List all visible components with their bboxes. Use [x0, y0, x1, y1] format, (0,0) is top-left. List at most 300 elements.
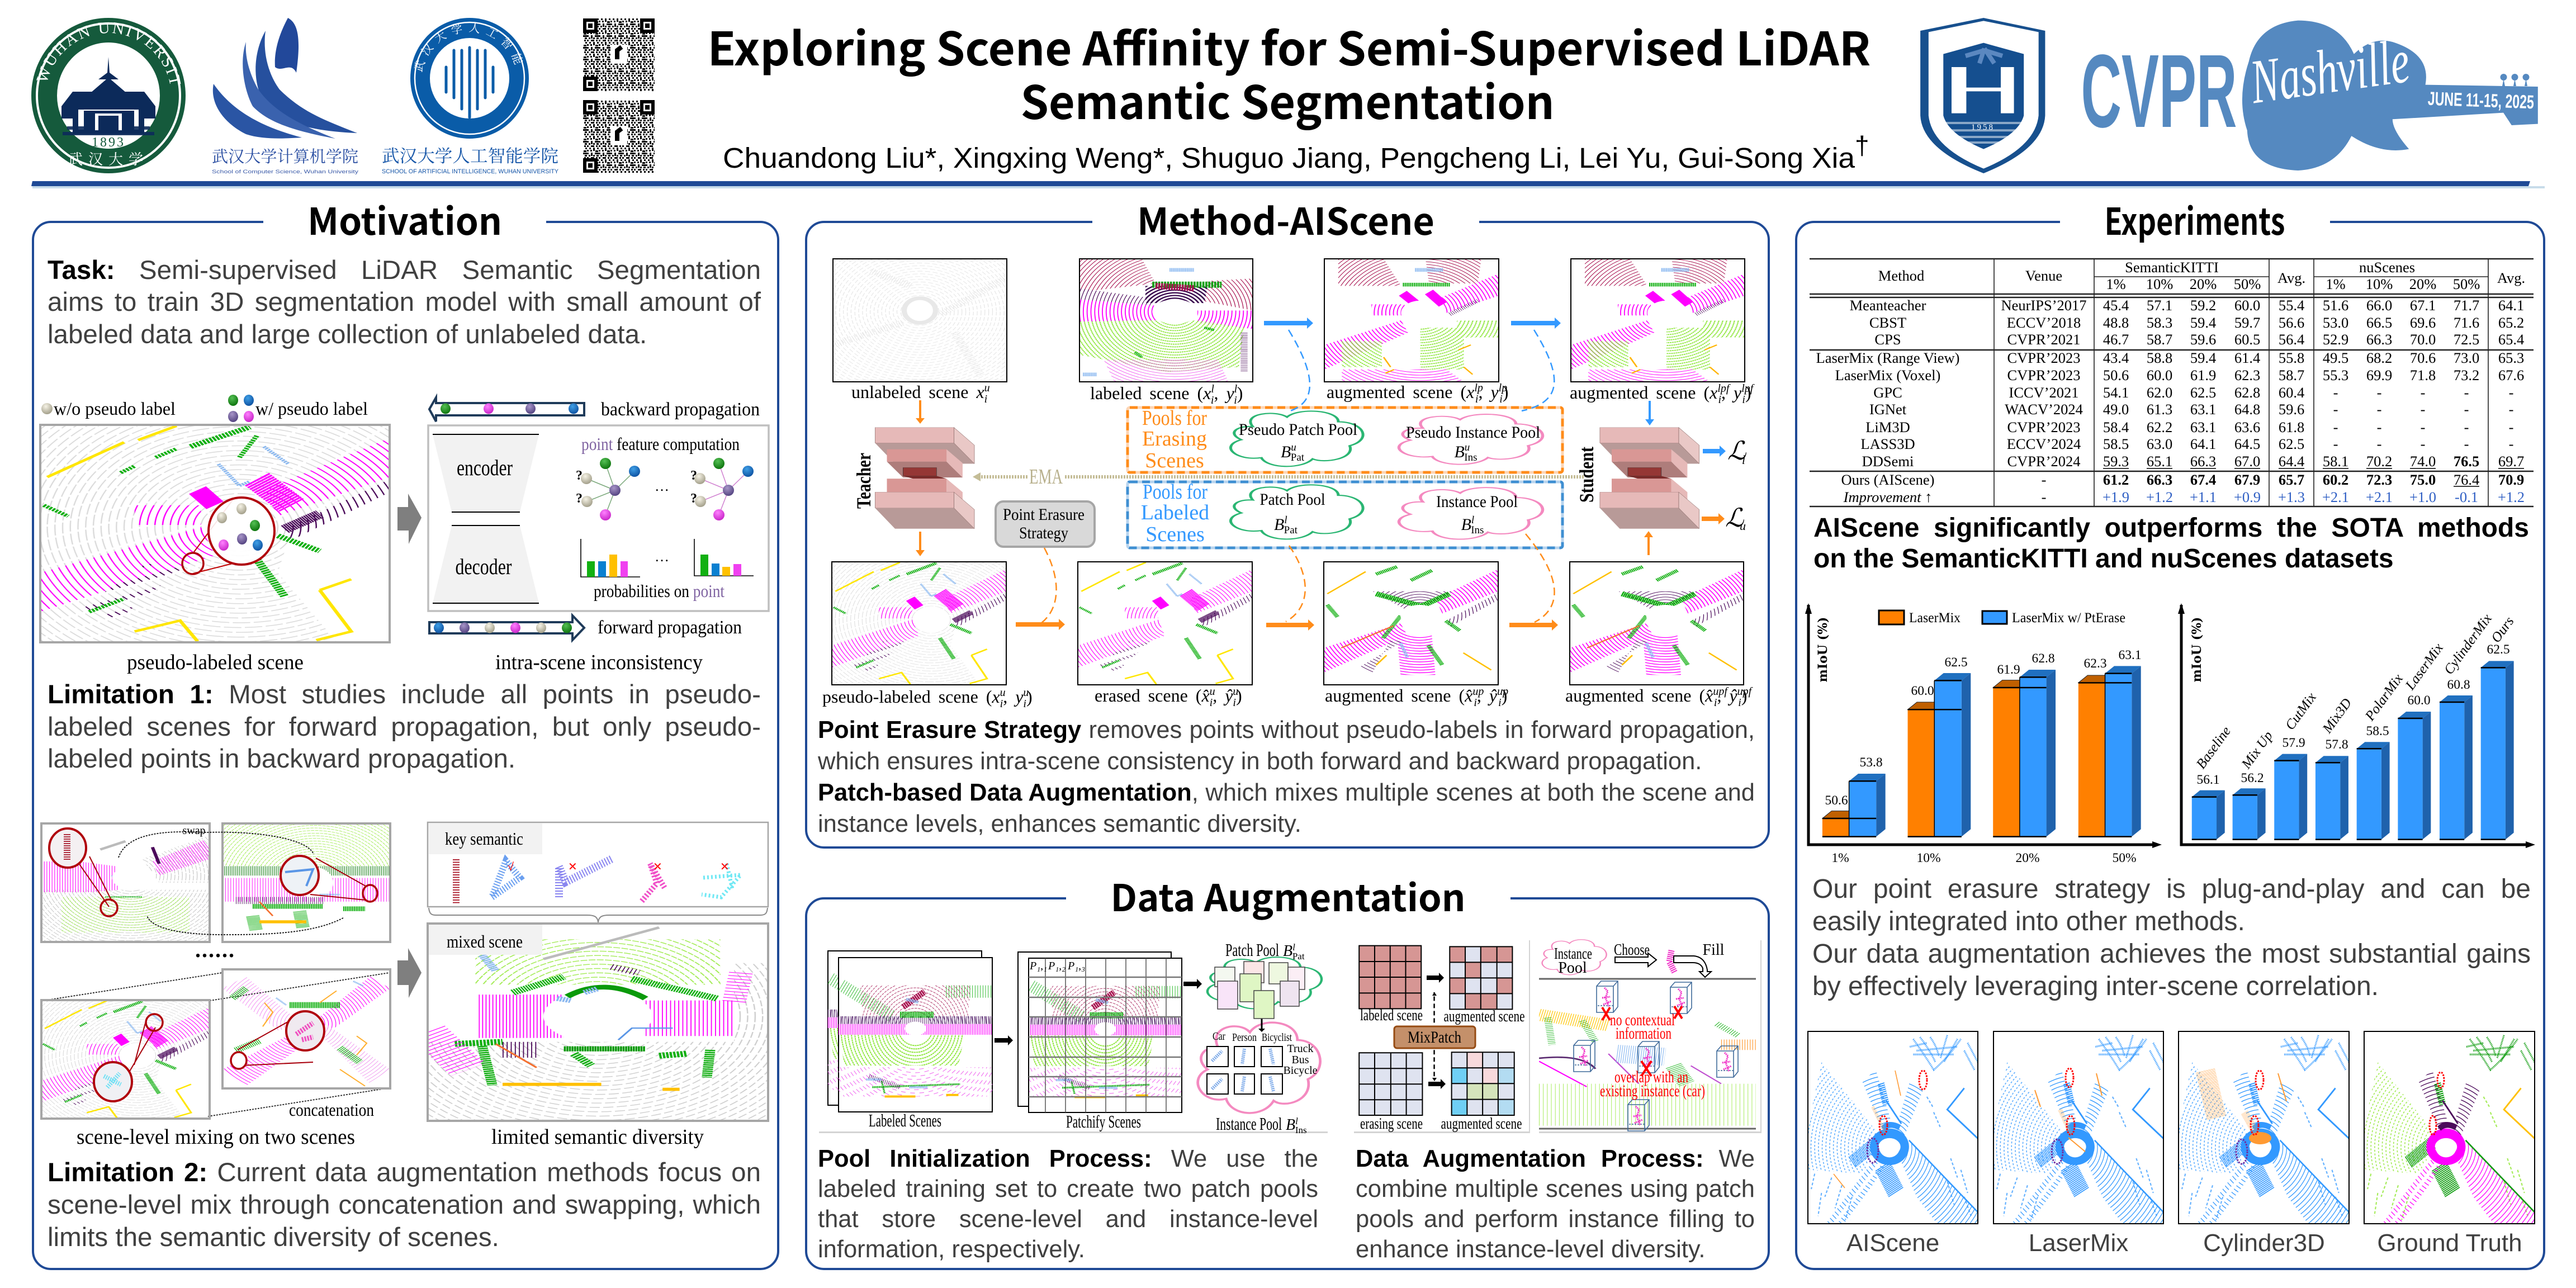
table: results comparison: 64.1: [2190, 435, 2216, 452]
logo: School of Computer Science: 武汉大学计算机学院: [212, 144, 358, 167]
panel: network box: …: [655, 478, 669, 494]
table: results comparison: Meanteacher: [1850, 297, 1926, 314]
table: results comparison: 76.4: [2454, 471, 2479, 488]
table: results comparison: 65.7: [2279, 471, 2304, 488]
figure: pool initialization: P₁,₃: [1067, 960, 1085, 972]
table: results comparison: 50.6: [2103, 367, 2129, 383]
table: results comparison: 65.2: [2498, 314, 2524, 331]
table: results comparison: -: [2509, 435, 2513, 452]
figure: pool initialization: Truck: [1287, 1043, 1314, 1055]
title: Semantic Segmentation: [1021, 66, 1554, 132]
captions: top row: labeled scene (x: [1090, 383, 1211, 403]
table: results comparison: 52.9: [2323, 331, 2348, 348]
table: results comparison: LaserMix (Range View): [1816, 349, 1959, 366]
captions: bottom row: ): [1502, 685, 1507, 705]
bar chart: augmentation methods: 56.2: [2241, 771, 2264, 785]
text: method description: Point Erasure Strategy removes points without pseudo-labels in forward propagation,: [818, 717, 1755, 744]
captions: bottom row: upf: [1713, 685, 1729, 698]
table: results comparison: SemanticKITTI: [2125, 259, 2219, 276]
figure: pool initialization: l: [1292, 942, 1295, 953]
bar chart: LaserMix vs PtErase: LaserMix: [1909, 610, 1961, 626]
loss labels: ℒ: [1725, 504, 1744, 532]
loss labels: u: [1740, 519, 1746, 533]
captions: bottom row: ,: [1717, 685, 1729, 705]
bar chart: augmentation methods: 58.5: [2366, 724, 2389, 738]
arrow: EMA dotted line: [973, 465, 1584, 489]
captions: top row: i: [1718, 394, 1721, 406]
panel: Data Augmentation: [805, 869, 1770, 1270]
bar chart: LaserMix vs PtErase: 20%: [2015, 851, 2040, 865]
text: data augmentation process: Data Augmentation Process: We: [1356, 1145, 1755, 1172]
table: results comparison: +1.1: [2190, 489, 2217, 505]
header: logos, title and authors: [31, 12, 2545, 188]
captions: bottom row: ,: [1003, 686, 1015, 707]
text: pool initialization process: Pool Initialization Process: We use the: [818, 1145, 1318, 1172]
figure: pseudo-labeled scene with zoom circle: [0, 336, 547, 718]
table: results comparison: CBST: [1869, 314, 1906, 331]
box: pools for labeled scenes: Patch Pool: [1260, 490, 1325, 509]
captions: top row: i: [1499, 393, 1503, 405]
figure: key semantic thumbnails: √: [508, 861, 514, 873]
dots between figures: ......: [195, 937, 235, 962]
table: results comparison: 58.7: [2147, 331, 2172, 348]
box: pools for erasing scenes: Scenes: [1145, 449, 1204, 472]
bar chart: augmentation methods: 60.8: [2447, 678, 2470, 692]
table: results comparison: +1.2: [2498, 489, 2525, 505]
table: results comparison: 73.0: [2454, 349, 2479, 366]
table: results comparison: 58.3: [2147, 314, 2172, 331]
captions: bottom row: ,: [1213, 685, 1225, 705]
table: results comparison: +1.3: [2278, 489, 2305, 505]
figure: pool initialization: [769, 886, 1328, 1165]
table: results comparison: -: [2464, 435, 2469, 452]
captions: bottom row: upf: [1737, 685, 1753, 698]
panel: network box: decoder: [455, 554, 512, 579]
bar chart: LaserMix vs PtErase: 1%: [1831, 851, 1849, 865]
legend: pseudo label balls: w/ pseudo label: [255, 399, 368, 419]
table: results comparison: 59.4: [2190, 314, 2216, 331]
logo: School of Artificial Intelligence: 武汉大学人工智能学院: [382, 142, 558, 167]
logo: CVPR Nashville guitar: [2081, 21, 2538, 171]
figure: swap mixing scenes: swap: [182, 825, 206, 837]
panel: Motivation: [32, 192, 779, 1270]
text: pool initialization process: that store scene-level and instance-level: [818, 1206, 1318, 1233]
text: data augmentation process: enhance instance-level diversity.: [1356, 1236, 1705, 1263]
table: results comparison: -: [2509, 401, 2513, 418]
text: conclusions: [1812, 874, 2531, 1001]
box: point erasure strategy: Strategy: [1019, 524, 1068, 542]
table: results comparison: Avg.: [2277, 269, 2305, 286]
bar chart: LaserMix vs PtErase: [1805, 603, 2162, 865]
table: results comparison: 66.3: [2366, 331, 2392, 348]
table: results comparison: -: [2464, 384, 2469, 401]
table: results comparison: 76.5: [2454, 453, 2479, 470]
bar chart: augmentation methods: 60.0: [2407, 693, 2431, 708]
captions: bottom row: u: [1210, 685, 1215, 698]
figure: AIScene result: [1740, 978, 2039, 1288]
panel: network box: point feature computation: [581, 434, 740, 454]
panel frame: [806, 222, 1769, 847]
captions: bottom row: i: [1714, 697, 1717, 709]
figure: mixpatch grids: augmented scene: [1441, 1115, 1522, 1133]
captions: bottom row: i: [1210, 697, 1213, 709]
captions: top row: augmented scene (x: [1327, 382, 1474, 402]
panel frame: [806, 898, 1769, 1269]
text: pool initialization process: labeled training set to create two patch pools: [818, 1176, 1318, 1202]
table: results comparison: 58.1: [2323, 453, 2348, 470]
table: results comparison: -: [2333, 419, 2338, 435]
table: results comparison: WACV’2024: [2005, 401, 2083, 418]
captions: top row: [851, 382, 1755, 406]
figure: concatenation mixing scenes: concatenation: [289, 1100, 374, 1120]
figure: pool initialization: Patch Pool: [1225, 940, 1279, 960]
box: pools for erasing scenes: Ins: [1464, 452, 1478, 463]
table: results comparison: 58.5: [2103, 435, 2129, 452]
text: limitation 2: Limitation 2: Current data augmentation methods focus on: [48, 1158, 761, 1187]
table: results comparison: 67.0: [2234, 453, 2260, 470]
arrows: block flow arrows: [916, 318, 1726, 631]
captions: result figures: Ground Truth: [2377, 1229, 2522, 1257]
table: results comparison: 70.6: [2410, 349, 2436, 366]
table: results comparison: 62.3: [2234, 367, 2260, 383]
bar chart: LaserMix vs PtErase: 50%: [2112, 851, 2137, 865]
panel: network box: ?: [690, 491, 697, 506]
text: data augmentation process: [1356, 1145, 1755, 1263]
figure: instance filling: information: [1616, 1024, 1671, 1043]
box: pools for labeled scenes: Labeled: [1141, 501, 1209, 524]
captions: bottom row: ŷ: [1488, 685, 1498, 705]
captions: bottom row: u: [1233, 685, 1238, 698]
figure: mixpatch grids: augmented scene: [1443, 1008, 1525, 1025]
captions: bottom row: ŷ: [1727, 685, 1737, 705]
captions: top row: y: [1489, 382, 1499, 402]
loss labels: [1725, 437, 1746, 533]
captions: top row: ): [1745, 382, 1751, 402]
captions: top row: i: [1211, 394, 1214, 406]
table: results comparison: 60.2: [2323, 471, 2348, 488]
text: pool initialization process: [818, 1145, 1318, 1263]
table: results comparison: 48.8: [2103, 314, 2129, 331]
loss labels: l: [1742, 453, 1745, 467]
QR code 1: [583, 18, 655, 91]
loss labels: ℒ: [1727, 437, 1746, 465]
arrow: forward propagation: [429, 615, 742, 640]
table: results comparison: 50%: [2234, 276, 2261, 292]
table: results comparison: Avg.: [2497, 269, 2525, 286]
table: results comparison: 60.0: [2147, 367, 2172, 383]
text: limitation 2: limits the semantic diversity of scenes.: [48, 1223, 499, 1252]
table: results comparison: 59.3: [2103, 453, 2129, 470]
table: results comparison: 62.2: [2147, 419, 2172, 435]
captions: bottom row: y: [1014, 686, 1024, 707]
text: conclusions: Our data augmentation achieves the most substantial gains: [1812, 939, 2531, 969]
text: data augmentation process: combine multiple scenes using patch: [1356, 1176, 1755, 1202]
table: results comparison: -: [2421, 435, 2425, 452]
captions: bottom row: ): [1026, 686, 1033, 707]
logo: CVPR Nashville guitar: CVPR: [2081, 34, 2237, 149]
logo: School of Artificial Intelligence: [382, 18, 559, 175]
table: results comparison: 59.6: [2190, 331, 2216, 348]
scene row: pseudo-labeled and augmented: [778, 508, 1819, 728]
table: results comparison: 56.4: [2279, 331, 2304, 348]
captions: bottom row: ): [1236, 685, 1242, 705]
table: results comparison: 54.1: [2103, 384, 2129, 401]
logo: Wuhan University: 武汉大学: [68, 148, 149, 169]
table: results comparison: 67.4: [2190, 471, 2216, 488]
text: task: aims to train 3D segmentation model with small amount of: [48, 287, 761, 317]
table: results comparison: 60.5: [2234, 331, 2260, 348]
figure: pool initialization: Bus: [1291, 1054, 1309, 1066]
text: key finding: [1813, 513, 2529, 574]
caption: pseudo-labeled scene: pseudo-labeled scene: [127, 651, 304, 674]
bar chart: LaserMix vs PtErase: mIoU (%): [1816, 617, 1830, 682]
table: results comparison: 67.6: [2498, 367, 2524, 383]
bar chart: augmentation methods: mIoU (%): [2190, 617, 2204, 682]
captions: top row: l: [1234, 383, 1238, 395]
table: results comparison: 59.2: [2190, 297, 2216, 314]
captions: bottom row: ): [1741, 685, 1747, 705]
authors: Chuandong Liu*, Xingxing Weng*, Shuguo Jiang, Pengcheng Li, Lei Yu, Gui-Song Xia: [723, 142, 1855, 174]
figure: pool initialization: Bicycle: [1283, 1064, 1318, 1077]
box: point erasure strategy: Point Erasure: [1003, 505, 1085, 524]
table: results comparison: 56.6: [2279, 314, 2304, 331]
table: results comparison: 66.3: [2190, 453, 2216, 470]
figure: pool initialization: Bicyclist: [1262, 1031, 1292, 1044]
caption: intra-scene inconsistency: intra-scene inconsistency: [495, 651, 703, 674]
logo: School of Computer Science: [212, 18, 358, 175]
figure: pool initialization: Instance Pool: [1216, 1114, 1282, 1134]
arrow: backward propagation: backward propagation: [601, 399, 760, 420]
table: results comparison: CPS: [1874, 331, 1901, 348]
figure: LaserMix result: [1925, 978, 2224, 1288]
heading: Data Augmentation: Data Augmentation: [1110, 869, 1466, 922]
table: results comparison: 1%: [2326, 276, 2346, 292]
captions: bottom row: up: [1472, 685, 1484, 698]
table: results comparison: 73.2: [2454, 367, 2479, 383]
table: results comparison: 58.7: [2279, 367, 2304, 383]
bar chart: LaserMix vs PtErase: 63.1: [2118, 648, 2142, 662]
figure: instance filling: overlap with an: [1614, 1068, 1688, 1086]
box: pools for erasing scenes: B: [1454, 443, 1465, 461]
table: results comparison: 62.8: [2234, 384, 2260, 401]
bar chart: LaserMix vs PtErase: LaserMix w/ PtErase: [2012, 610, 2125, 626]
table: results comparison: -: [2042, 471, 2046, 488]
table: results comparison: 46.7: [2103, 331, 2129, 348]
logo: Wuhan University: [31, 18, 186, 173]
figure: key semantic thumbnails: key semantic: [445, 828, 523, 849]
table: results comparison: LASS3D: [1860, 435, 1915, 452]
table: results comparison: 20%: [2409, 276, 2436, 292]
box: pools for labeled scenes: Scenes: [1145, 523, 1205, 546]
table: results comparison: 61.3: [2147, 401, 2172, 418]
table: results comparison: 71.6: [2454, 314, 2479, 331]
text: method description: instance levels, enhances semantic diversity.: [818, 811, 1301, 837]
bar chart: LaserMix vs PtErase: 10%: [1916, 851, 1941, 865]
figure: pool initialization: Person: [1232, 1031, 1257, 1044]
panel: Method-AIScene: [805, 192, 1770, 849]
bar chart: LaserMix vs PtErase: 53.8: [1859, 755, 1883, 770]
table: results comparison: 62.0: [2147, 384, 2172, 401]
text: method description: which ensures intra-scene consistency in both forward and backward propagation.: [818, 748, 1702, 775]
bar chart: LaserMix vs PtErase: 50.6: [1825, 793, 1848, 808]
table: results comparison: 62.5: [2190, 384, 2216, 401]
table: results comparison: Improvement ↑: [1843, 489, 1932, 505]
captions: bottom row: i: [1498, 697, 1502, 709]
box: pools for labeled scenes: [1128, 480, 1562, 548]
table: results comparison: -: [2042, 489, 2046, 505]
table: results comparison: 20%: [2190, 276, 2217, 292]
caption: limited semantic diversity: limited semantic diversity: [491, 1125, 704, 1149]
figure: pool initialization: Ins: [1295, 1125, 1307, 1135]
figure: mixed scene: [299, 842, 897, 1190]
table: results comparison: +1.9: [2103, 489, 2129, 505]
table: results comparison: -: [2421, 419, 2425, 435]
block: student network: [1575, 428, 1699, 529]
figure: instance filling: existing instance (car): [1600, 1082, 1705, 1100]
text: limitation 2: scene-level mix through concatenation and swapping, which: [48, 1190, 761, 1220]
bar chart: augmentation methods: [2178, 603, 2535, 848]
table: results comparison: 58.8: [2147, 349, 2172, 366]
figure: pool initialization: Car: [1213, 1030, 1225, 1043]
table: results comparison: -: [2333, 384, 2338, 401]
panel: network box: encoder: [457, 455, 513, 480]
table: results comparison: 75.0: [2410, 471, 2436, 488]
figure: key semantic thumbnails: ✕: [653, 861, 662, 873]
captions: top row: i: [1234, 394, 1237, 406]
scene row: labeled and unlabeled: [767, 203, 1820, 421]
legend: pseudo label balls: [41, 395, 368, 422]
table: results comparison: 60.4: [2279, 384, 2304, 401]
table: results comparison: ICCV’2021: [2009, 384, 2079, 401]
text: pool initialization process: information, respectively.: [818, 1236, 1085, 1263]
table: results comparison: 72.3: [2366, 471, 2392, 488]
table: results comparison: +1.0: [2409, 489, 2436, 505]
table: results comparison: 69.9: [2366, 367, 2392, 383]
heading: Method-AIScene: Method-AIScene: [1137, 192, 1434, 246]
table: results comparison: 74.0: [2410, 453, 2436, 470]
text: data augmentation process: pools and perform instance filling to: [1356, 1206, 1755, 1233]
table: results comparison: Method: [1878, 267, 1924, 284]
captions: bottom row: i: [1738, 697, 1741, 709]
captions: bottom row: i: [1474, 697, 1477, 709]
captions: top row: u: [984, 382, 990, 394]
table: results comparison: -: [2377, 435, 2381, 452]
box: pools for erasing scenes: Erasing: [1142, 427, 1207, 451]
text: limitation 1: [48, 680, 761, 774]
table: results comparison: 67.1: [2410, 297, 2436, 314]
text: limitation 1: Limitation 1: Most studies include all points in pseudo-: [48, 680, 761, 709]
box: pools for erasing scenes: u: [1465, 442, 1470, 453]
table: results comparison: -: [2377, 384, 2381, 401]
table: results comparison: 58.4: [2103, 419, 2129, 435]
table: results comparison: -0.1: [2455, 489, 2478, 505]
table: results comparison: 61.4: [2234, 349, 2260, 366]
table: results comparison: Venue: [2025, 267, 2062, 284]
captions: top row: ,: [1214, 383, 1226, 403]
text: method description: [818, 717, 1755, 837]
table: results comparison: CVPR’2023: [2007, 349, 2081, 366]
captions: bottom row: [822, 685, 1753, 710]
table: results comparison: -: [2377, 419, 2381, 435]
panel: network box: probabilities on point: [594, 581, 724, 601]
captions: top row: unlabeled scene x: [851, 382, 984, 402]
table: results comparison: LaserMix (Voxel): [1835, 367, 1940, 383]
table: results comparison: 70.0: [2410, 331, 2436, 348]
table: results comparison: 65.4: [2498, 331, 2524, 348]
table: results comparison: -: [2464, 401, 2469, 418]
bar chart: augmentation methods: Ours: [2488, 614, 2517, 646]
bar chart: augmentation methods: PolarMix: [2362, 671, 2406, 724]
arrow: grey chevron 2: [397, 948, 422, 998]
figure: concatenation mixing scenes: [0, 920, 454, 1160]
figure: key semantic thumbnails: ✕: [568, 861, 577, 873]
text: limitation 2: [48, 1158, 761, 1252]
box: pools for labeled scenes: Instance Pool: [1436, 493, 1518, 511]
table: results comparison: ECCV’2024: [2007, 435, 2081, 452]
table: results comparison: CVPR’2024: [2007, 453, 2081, 470]
box: pools for erasing scenes: Pat: [1291, 452, 1305, 463]
table: results comparison: 49.5: [2323, 349, 2348, 366]
table: results comparison: 62.5: [2279, 435, 2304, 452]
bar chart: augmentation methods: CylinderMix: [2441, 612, 2495, 678]
text: method description: Patch-based Data Augmentation, which mixes multiple scenes at both the scene and: [818, 779, 1755, 806]
table: results comparison: 63.0: [2147, 435, 2172, 452]
box: pools for erasing scenes: Pools for: [1142, 406, 1207, 430]
arrow: EMA dotted line: EMA: [1029, 465, 1063, 489]
figure: mixpatch grids: erasing scene: [1360, 1115, 1423, 1133]
captions: result figures: Cylinder3D: [2203, 1229, 2325, 1257]
heading: Experiments: Experiments: [2104, 192, 2285, 246]
table: results comparison: 63.1: [2190, 401, 2216, 418]
bar chart: LaserMix vs PtErase: 61.9: [1997, 662, 2020, 677]
Hainan seal text: 1958: [1971, 123, 1995, 132]
block: teacher network: [853, 428, 974, 529]
table: results comparison: -: [2509, 419, 2513, 435]
table: results comparison: -: [2421, 401, 2425, 418]
captions: bottom row: i: [1000, 698, 1003, 710]
caption: scene-level mixing: scene-level mixing on two scenes: [77, 1125, 355, 1149]
table: results comparison: 71.8: [2410, 367, 2436, 383]
table: results comparison: 63.1: [2190, 419, 2216, 435]
panel: network box: ?: [576, 468, 583, 483]
box: pools for labeled scenes: Ins: [1471, 524, 1484, 536]
figure: instance filling: Fill: [1703, 941, 1725, 959]
table: results comparison: LiM3D: [1865, 419, 1910, 435]
bar chart: LaserMix vs PtErase: 62.5: [1944, 655, 1968, 670]
table: results comparison: NeurIPS’2017: [2001, 297, 2087, 314]
title: [708, 12, 1871, 132]
arrow: forward propagation: forward propagation: [598, 617, 742, 638]
box: pools for erasing scenes: B: [1281, 443, 1291, 461]
panel: network box: ?: [576, 491, 583, 506]
captions: bottom row: pseudo-labeled scene (x: [822, 686, 1000, 707]
arrows: dashed curves: [1041, 330, 1555, 623]
table: results comparison: 10%: [2366, 276, 2393, 292]
captions: top row: i: [984, 393, 987, 405]
table: results comparison: 66.3: [2147, 471, 2172, 488]
table: results comparison: 61.2: [2103, 471, 2129, 488]
table: results comparison: +2.1: [2366, 489, 2393, 505]
table: results comparison: Ours (AIScene): [1841, 471, 1935, 488]
table: results comparison: [1810, 259, 2534, 506]
text: conclusions: Our point erasure strategy is plug-and-play and can be: [1812, 874, 2531, 904]
captions: top row: ,: [1721, 382, 1734, 402]
captions: top row: y: [1732, 382, 1742, 402]
logo: School of Artificial Intelligence: SCHOOL OF ARTIFICIAL INTELLIGENCE, WUHAN UNIVERSITY: [382, 168, 559, 175]
bar chart: augmentation methods: Mix3D: [2319, 696, 2355, 736]
heading: Motivation: [263, 192, 546, 246]
figure: instance filling: Choose: [1614, 941, 1650, 959]
